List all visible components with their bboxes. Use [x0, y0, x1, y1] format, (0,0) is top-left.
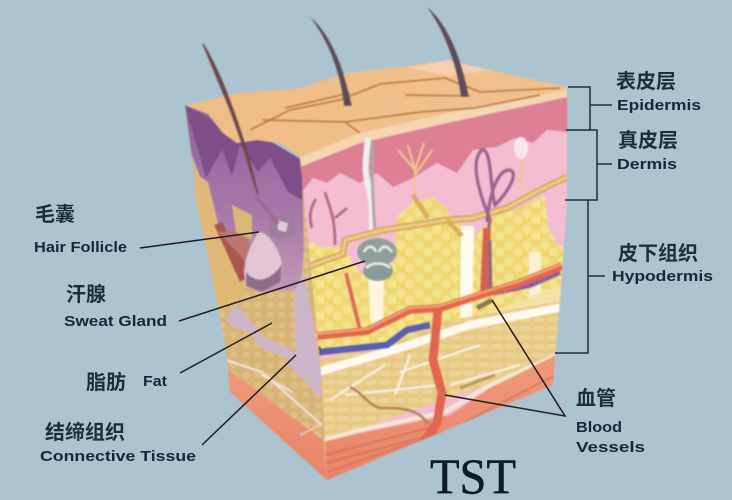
lower hypodermis [318, 300, 568, 442]
sweat duct [366, 138, 372, 232]
brackets [555, 87, 612, 353]
label: blood: Blood [576, 419, 622, 436]
lower left fat blocks [238, 328, 258, 344]
label: hypodermis zh: 皮下组织 [618, 242, 698, 265]
bracket: hypodermis [555, 200, 605, 353]
pointer lines [140, 232, 565, 445]
line: hair follicle [140, 232, 259, 248]
nerve ending [398, 143, 432, 197]
connective tissue lilac [226, 272, 321, 398]
label: fat: Fat [143, 373, 167, 390]
dermal vessels [310, 192, 347, 245]
label: epidermis zh: 表皮层 [616, 70, 676, 93]
label: hair follicle: Hair Follicle [34, 239, 127, 256]
label: connective tissue: Connective Tissue [40, 448, 196, 465]
purple dermis on left face [185, 105, 304, 296]
artery branch [346, 273, 360, 330]
upper tan block [244, 290, 295, 298]
panel: right cut face [295, 85, 575, 485]
sebaceous gland [268, 212, 296, 240]
line: fat [180, 323, 272, 373]
panel: left cut face [180, 100, 330, 490]
line: sweat gland [179, 261, 365, 321]
label: sweat gland: Sweat Gland [64, 313, 167, 330]
bracket: dermis [565, 130, 612, 200]
pale hump on back edge [408, 60, 490, 76]
line: connective tissue [202, 355, 296, 445]
hair 2 [310, 17, 352, 106]
vein [320, 325, 430, 352]
label: hypodermis: Hypodermis [612, 268, 713, 285]
descending artery [420, 310, 442, 448]
bracket: epidermis [568, 87, 612, 130]
vessel loops [476, 150, 513, 292]
skin block illustration [180, 7, 575, 490]
label: vessels: Vessels [576, 439, 645, 456]
main artery [317, 266, 562, 336]
label: blood vessels zh: 血管 [576, 387, 616, 410]
label: connective tissue zh: 结缔组织 [45, 420, 125, 444]
label: dermis zh: 真皮层 [618, 128, 678, 152]
dark pink dermis [300, 96, 568, 190]
labels [34, 70, 713, 465]
label: fat zh: 脂肪 [86, 370, 126, 394]
sweat gland [357, 238, 397, 281]
left muscle [226, 368, 327, 482]
surface creases [250, 78, 560, 133]
corpuscle [520, 160, 522, 190]
fat column on left edge [194, 174, 244, 307]
hair 1 [203, 44, 258, 195]
label: dermis: Dermis [617, 156, 677, 173]
line: blood vessels [445, 300, 565, 416]
fat blocks [300, 197, 468, 352]
label: sweat gland zh: 汗腺 [66, 283, 106, 306]
nerves [307, 177, 567, 267]
small lower vessel [350, 387, 428, 424]
hair 3 [427, 7, 469, 97]
pale tissue channels [368, 272, 384, 330]
label: hair follicle zh: 毛囊 [35, 203, 75, 226]
hair follicle bulb [244, 232, 282, 288]
label: epidermis: Epidermis [617, 97, 701, 114]
panel: top skin surface [185, 60, 567, 157]
muscle layer [323, 355, 556, 482]
epidermis band [300, 85, 567, 167]
